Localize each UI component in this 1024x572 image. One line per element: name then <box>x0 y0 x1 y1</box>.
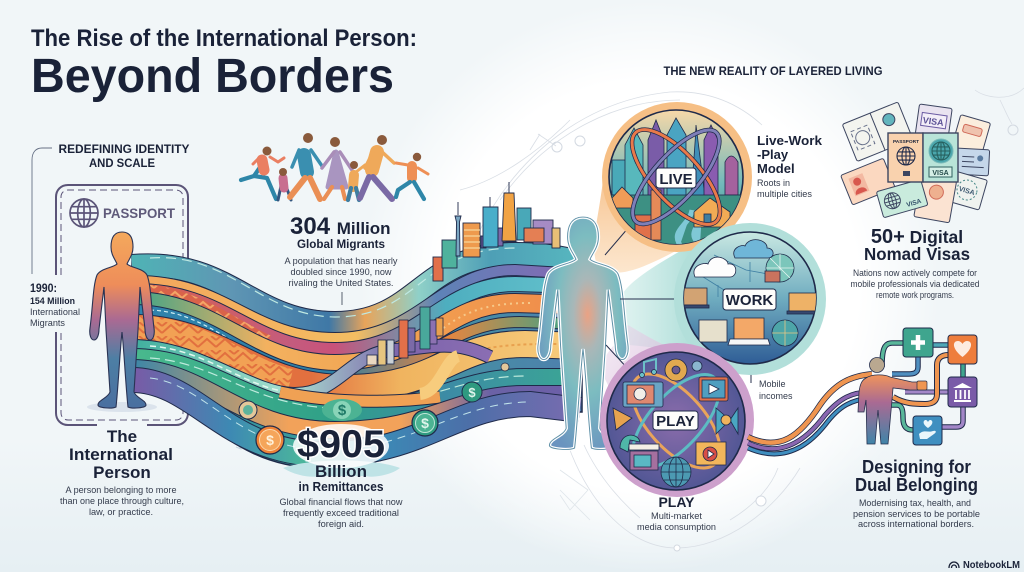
text: live-work-play model <box>757 133 823 199</box>
text block: the international person: International <box>69 445 173 464</box>
text: live-work-play model: -Play <box>757 147 789 162</box>
text: play caption: PLAY <box>658 494 695 510</box>
migrating family <box>241 133 428 200</box>
icon: visas and passports cluster: VISA <box>958 186 975 197</box>
text: mobile incomes: Mobile <box>759 379 786 389</box>
icon: visas and passports cluster: PASSPORT <box>893 139 919 145</box>
stat: 304 million global migrants: doubled since 1990, now <box>290 267 392 278</box>
migration ribbons <box>132 242 582 468</box>
stat: 1990 migrants: International <box>30 307 80 317</box>
panel: live bubble: LIVE <box>659 171 693 188</box>
text: designing for dual belonging: pension services to be portable <box>853 509 980 520</box>
text: designing for dual belonging: Modernising tax, health, and <box>859 498 971 509</box>
panel: play bubble <box>600 343 754 497</box>
icon: coins and dollar symbols: $ <box>421 415 429 431</box>
stat: 905 billion remittances: foreign aid. <box>318 519 364 530</box>
figure: designer <box>858 358 927 444</box>
stat: 905 billion remittances: frequently exceed traditional <box>283 508 399 519</box>
text block: the international person: A person belonging to more <box>66 485 176 496</box>
panel: live bubble <box>602 102 752 255</box>
icon: coins and dollar symbols <box>239 363 509 454</box>
title: The Rise of the International Person: <box>31 25 417 52</box>
text: digital nomad visas: remote work programs. <box>876 290 954 301</box>
title <box>31 25 417 103</box>
text: live-work-play model: Roots in <box>757 178 790 188</box>
text: digital nomad visas: mobile professionals via dedicated <box>850 279 980 290</box>
stat: 304 million global migrants: A population that has nearly <box>284 256 398 267</box>
icon: visas and passports cluster <box>841 102 991 223</box>
title: Beyond Borders <box>31 50 394 103</box>
section heading: new reality: THE NEW REALITY OF LAYERED LIVING <box>664 66 883 78</box>
stat: 905 billion remittances: Global financial flows that now <box>280 497 403 508</box>
section heading: redefining identity: AND SCALE <box>89 158 155 170</box>
text: digital nomad visas: Nations now actively compete for <box>853 268 977 279</box>
icon: coins and dollar symbols: $ <box>468 385 476 400</box>
text: play caption: media consumption <box>637 522 716 532</box>
icon: health plus <box>903 328 933 357</box>
text: live-work-play model: Live-Work <box>757 133 823 148</box>
stat: 905 billion remittances <box>280 423 403 530</box>
stat: 1990 migrants <box>30 283 80 328</box>
skyline on the ribbons <box>433 182 560 281</box>
icon: visas and passports cluster: VISA <box>932 170 949 177</box>
bubble tails <box>594 170 700 470</box>
stat: 1990 migrants: 1990: <box>30 283 57 295</box>
text: designing for dual belonging: Dual Belonging <box>855 475 978 495</box>
icon: visas and passports cluster: VISA <box>922 115 945 128</box>
section heading: redefining identity <box>32 144 190 274</box>
stat: 1990 migrants: 154 Million <box>30 296 75 306</box>
text: digital nomad visas: 50+ Digital <box>871 226 963 248</box>
text: play caption: Multi-market <box>651 511 703 521</box>
passport frame <box>56 185 188 425</box>
text block: the international person: The <box>107 427 137 446</box>
stat: 905 billion remittances: Billion <box>315 462 367 481</box>
stat: 304 million global migrants: rivaling the United States. <box>288 278 394 289</box>
text block: the international person: than one place through culture, <box>60 496 184 507</box>
middle city skyline <box>367 307 443 365</box>
text block: the international person: law, or practice. <box>89 507 153 518</box>
icon: coins and dollar symbols: $ <box>266 432 274 448</box>
text: digital nomad visas: Nomad Visas <box>864 244 970 264</box>
notebooklm logo: NotebookLM <box>963 560 1020 571</box>
stat: 304 million global migrants: 304 Million <box>290 213 391 240</box>
icon: bank <box>948 377 977 407</box>
text: live-work-play model: multiple cities <box>757 189 812 199</box>
icon: coins and dollar symbols: $ <box>338 402 347 419</box>
panel: work bubble <box>674 223 826 375</box>
service ribbons from play to designer <box>748 374 872 454</box>
text block: the international person: Person <box>93 463 151 482</box>
stat: 905 billion remittances: in Remittances <box>298 480 384 494</box>
stat: 304 million global migrants <box>284 213 398 305</box>
text: digital nomad visas <box>850 226 980 301</box>
text: designing for dual belonging: across international borders. <box>858 519 974 530</box>
section heading: redefining identity: REDEFINING IDENTITY <box>58 144 190 156</box>
text: mobile incomes <box>759 379 793 401</box>
panel: play bubble: PLAY <box>656 413 695 430</box>
text: designing for dual belonging: Designing for <box>862 457 971 477</box>
icon: visas and passports cluster: VISA <box>906 198 923 209</box>
stat: 304 million global migrants: Global Migrants <box>297 239 385 251</box>
text: designing for dual belonging <box>853 457 980 530</box>
text: live-work-play model: Model <box>757 161 795 176</box>
connector lines <box>605 227 751 383</box>
icon: heart <box>948 335 977 364</box>
stat: 1990 migrants: Migrants <box>30 318 66 328</box>
right figure: layered person <box>538 217 628 449</box>
text block: the international person <box>60 427 184 518</box>
icon: caring hand <box>913 416 942 445</box>
panel: work bubble: WORK <box>726 292 773 309</box>
text: mobile incomes: incomes <box>759 391 793 401</box>
stat: 905 billion remittances: $905 <box>297 423 385 466</box>
left figure: international person <box>87 232 157 412</box>
service network pipes <box>882 343 963 430</box>
passport frame: PASSPORT <box>103 205 175 221</box>
text: play caption <box>637 494 716 532</box>
